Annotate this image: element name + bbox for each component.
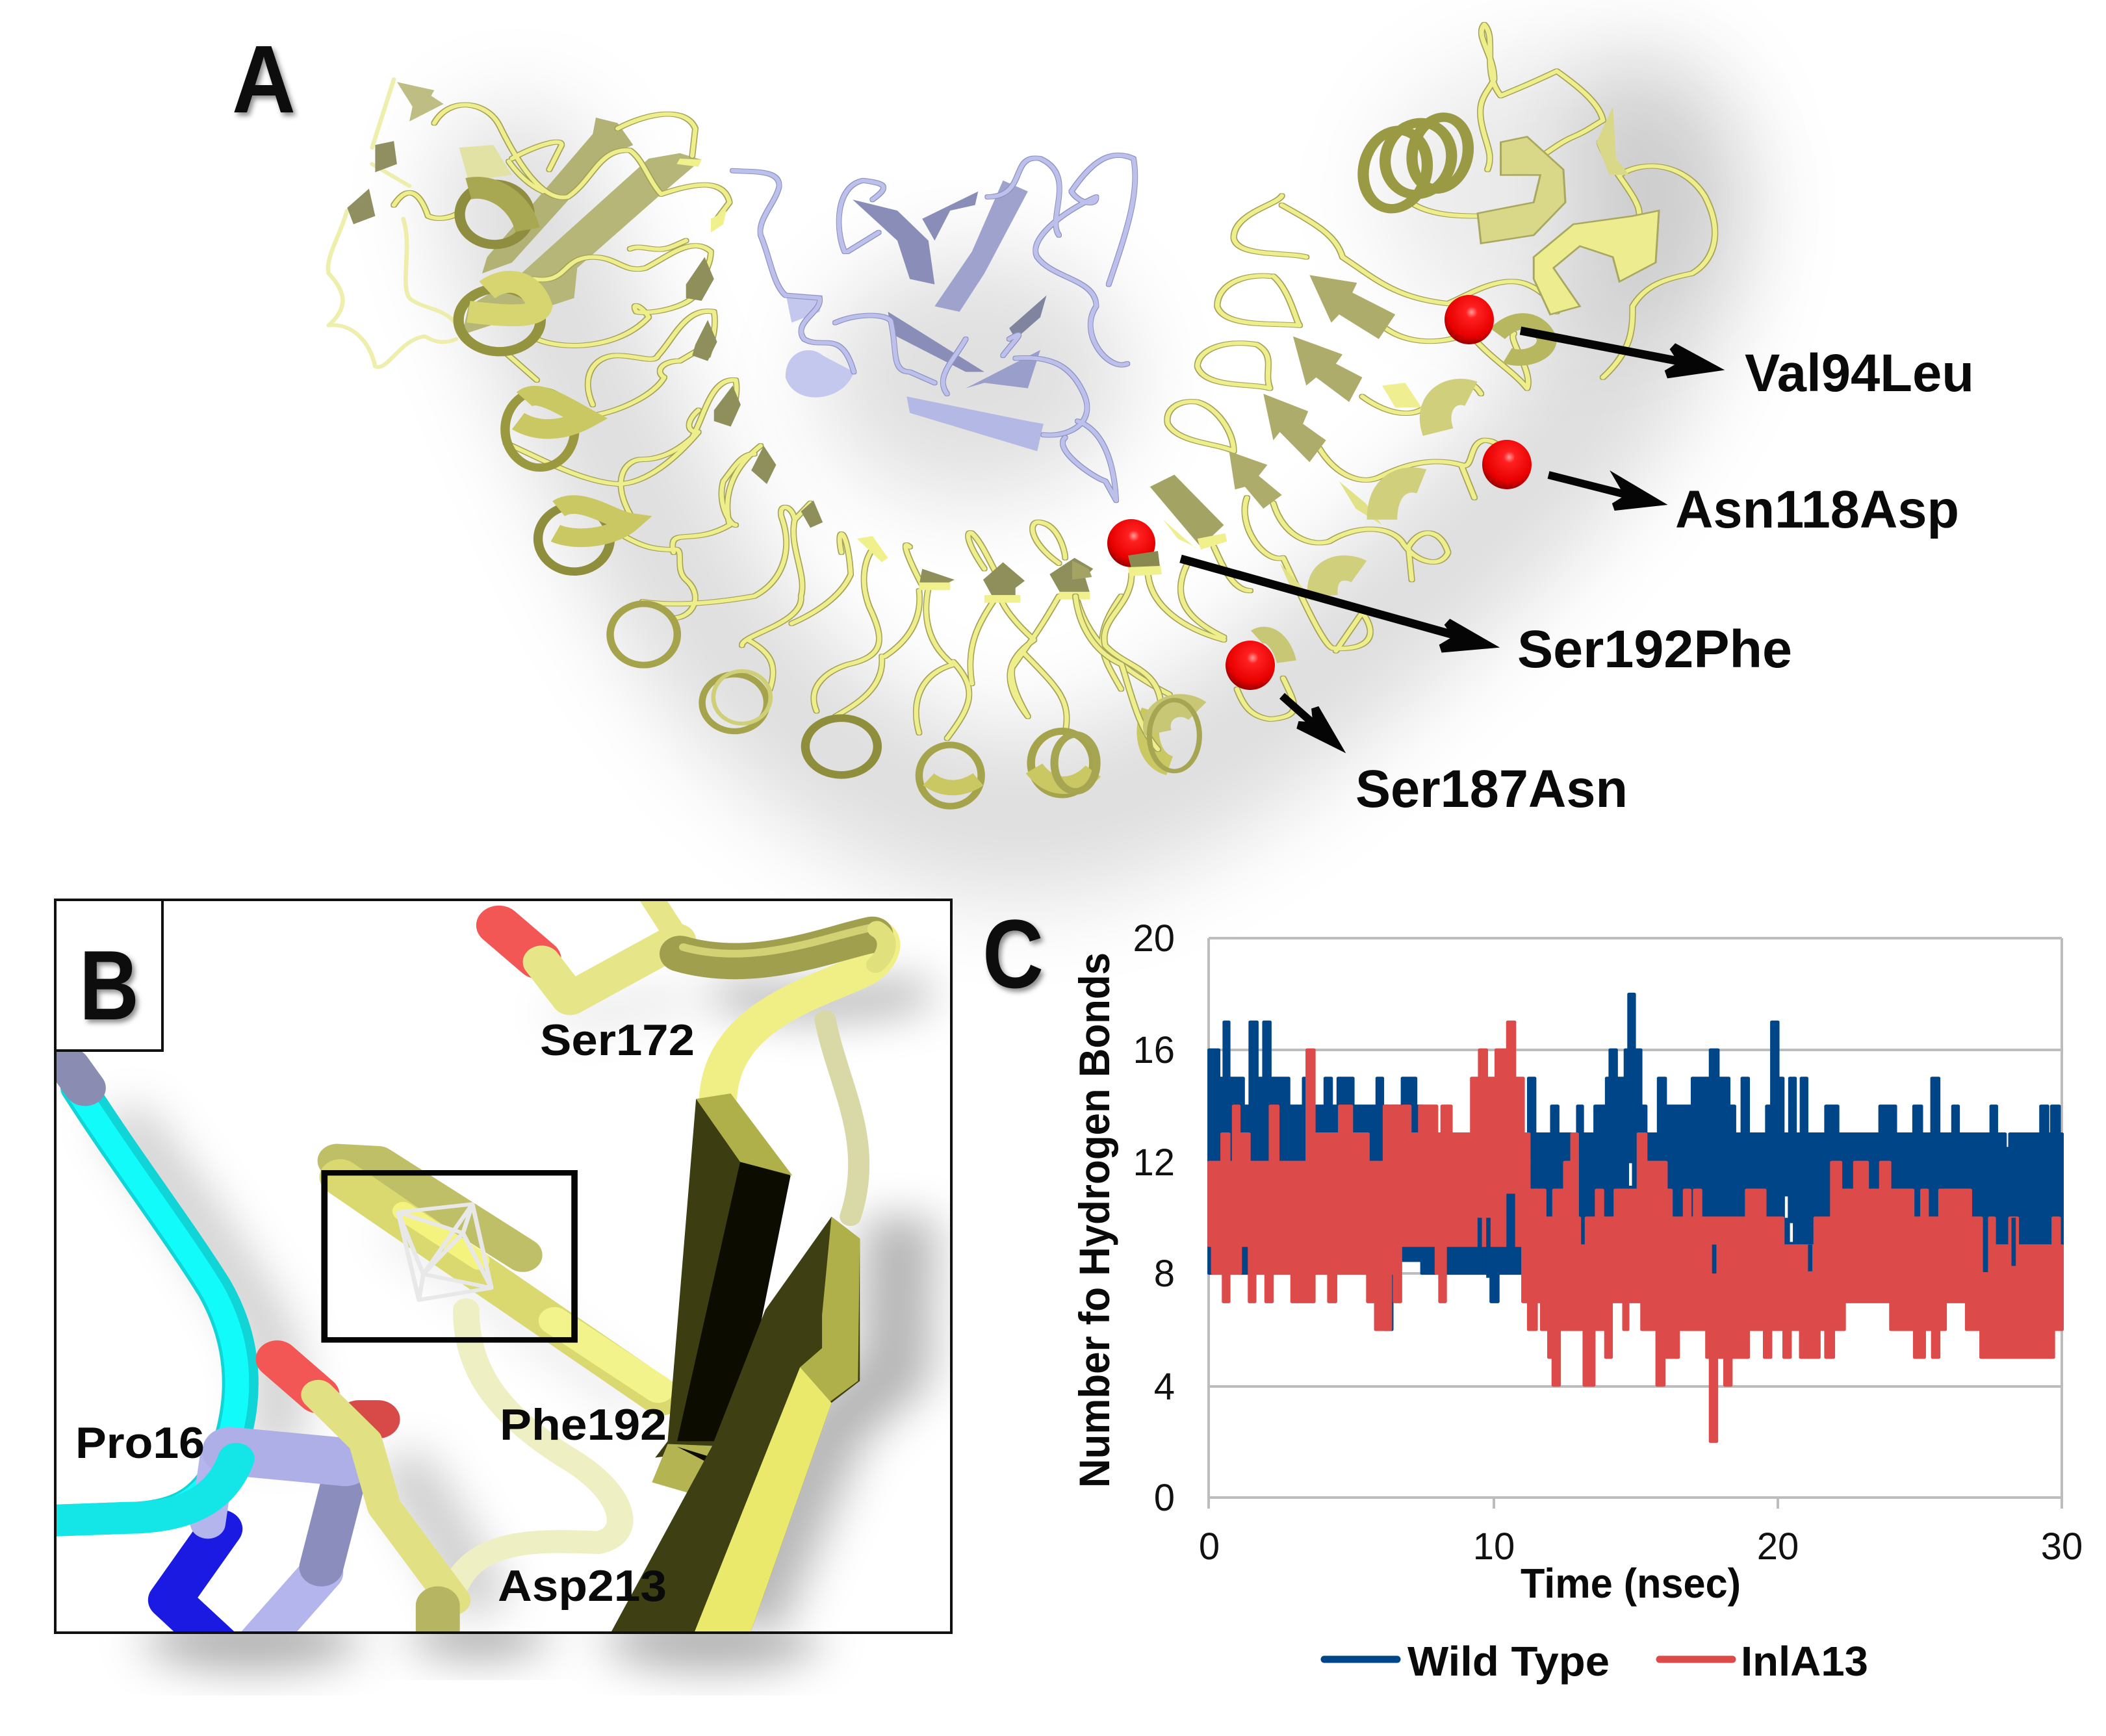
- residue Pro16 sticks: [170, 1451, 345, 1644]
- lilac beta strands: [853, 181, 1047, 451]
- chart gridlines and axes: [1209, 938, 2062, 1509]
- label: Ser172: Ser172: [540, 1015, 695, 1065]
- y axis tick labels: 16: [1133, 1029, 1175, 1071]
- residue Ser172 sticks: [499, 893, 677, 999]
- white gaps in the blue series: [1630, 1163, 1791, 1242]
- faint background tubes: [457, 1310, 620, 1583]
- x axis tick labels: 10: [1473, 1525, 1515, 1568]
- x axis tick labels: 30: [2041, 1525, 2083, 1568]
- x axis tick labels: [1199, 1525, 2083, 1568]
- y axis tick labels: 0: [1154, 1477, 1175, 1519]
- y axis title: Number fo Hydrogen Bonds: [1070, 952, 1118, 1488]
- y axis tick labels: 8: [1154, 1253, 1175, 1295]
- mutation site spheres: [1107, 295, 1532, 690]
- pale strand feet: [676, 159, 1090, 603]
- x axis tick labels: 0: [1199, 1525, 1220, 1568]
- top backbone tube: [680, 928, 886, 1096]
- panel letter B: B: [79, 930, 139, 1041]
- panel A: protein ribbon structure: [232, 25, 1974, 819]
- close-up contents: [51, 893, 926, 1644]
- label: Val94Leu: Val94Leu: [1745, 344, 1974, 403]
- highlight box around Phe192: [324, 1173, 574, 1340]
- y axis tick labels: 20: [1133, 917, 1175, 960]
- right inner loops: [1075, 25, 1715, 749]
- arrow: Ser192Phe: [1181, 559, 1486, 648]
- right helices: [1055, 107, 1659, 791]
- dark back strand: [652, 1093, 793, 1499]
- panel B frame: [55, 900, 951, 1633]
- legend: [1324, 1638, 1868, 1685]
- lilac small helix: [786, 292, 854, 398]
- label: Ser192Phe: Ser192Phe: [1517, 620, 1792, 679]
- panel letter box: [55, 900, 162, 1051]
- panel letter C: C: [982, 899, 1044, 1008]
- label: Asp213: Asp213: [498, 1561, 667, 1611]
- faint far loops: [328, 79, 462, 367]
- y axis tick labels: 12: [1133, 1142, 1175, 1184]
- series: InlA13: [1209, 1022, 2062, 1442]
- label: Ser187Asn: Ser187Asn: [1355, 760, 1628, 819]
- legend key: Wild Type: Wild Type: [1407, 1638, 1610, 1685]
- panel C: hydrogen bond time series: [982, 899, 2083, 1685]
- arrow: Asn118Asp: [1548, 475, 1656, 507]
- y axis tick labels: 4: [1154, 1366, 1175, 1408]
- right half of the yellow domain: [1055, 25, 1715, 791]
- arrow: Val94Leu: [1521, 331, 1712, 374]
- strand stub over Ser192 sphere: [1128, 551, 1162, 576]
- inner loops: [394, 105, 1170, 738]
- lilac loops: [732, 155, 1135, 500]
- shadows below panel B: [145, 1611, 819, 1671]
- series: Wild Type: [1209, 994, 2062, 1330]
- cyan overlap at Pro16: [51, 1459, 237, 1521]
- arrow: Ser187Asn: [1282, 696, 1336, 744]
- left half of the yellow domain: [328, 79, 1170, 806]
- small inner-arc arrows: [686, 257, 1093, 599]
- y axis tick labels: [1133, 917, 1175, 1519]
- right beta arrows: [1072, 275, 1422, 602]
- residue Phe192 stick: [337, 1161, 661, 1398]
- x axis tick labels: 20: [1757, 1525, 1799, 1568]
- drop shadow of the protein: [518, 52, 1741, 817]
- panel B: binding site close-up: [51, 893, 951, 1671]
- lilac bound protein (E-cadherin domain): [732, 155, 1135, 500]
- electron density wireframe: [398, 1204, 491, 1300]
- legend key: InlA13: InlA13: [1741, 1638, 1868, 1685]
- label: Pro16: Pro16: [75, 1418, 205, 1468]
- helices, left side: [459, 185, 1170, 806]
- grey-blue cap: [70, 1066, 85, 1088]
- front strand: [605, 1217, 860, 1644]
- line chart data: [1209, 994, 2062, 1442]
- label: Phe192: Phe192: [500, 1400, 667, 1449]
- x axis title: Time (nsec): [1521, 1560, 1741, 1607]
- beta strands, top domain: [347, 82, 702, 335]
- residue Asp213 sticks: [277, 1359, 454, 1644]
- blue peeking through red: [1480, 1194, 2014, 1278]
- soft shadows inside panel: [120, 992, 926, 1628]
- panel letter A: A: [232, 26, 296, 133]
- label: Asn118Asp: Asn118Asp: [1675, 480, 1959, 539]
- cyan backbone tube: [51, 1088, 240, 1521]
